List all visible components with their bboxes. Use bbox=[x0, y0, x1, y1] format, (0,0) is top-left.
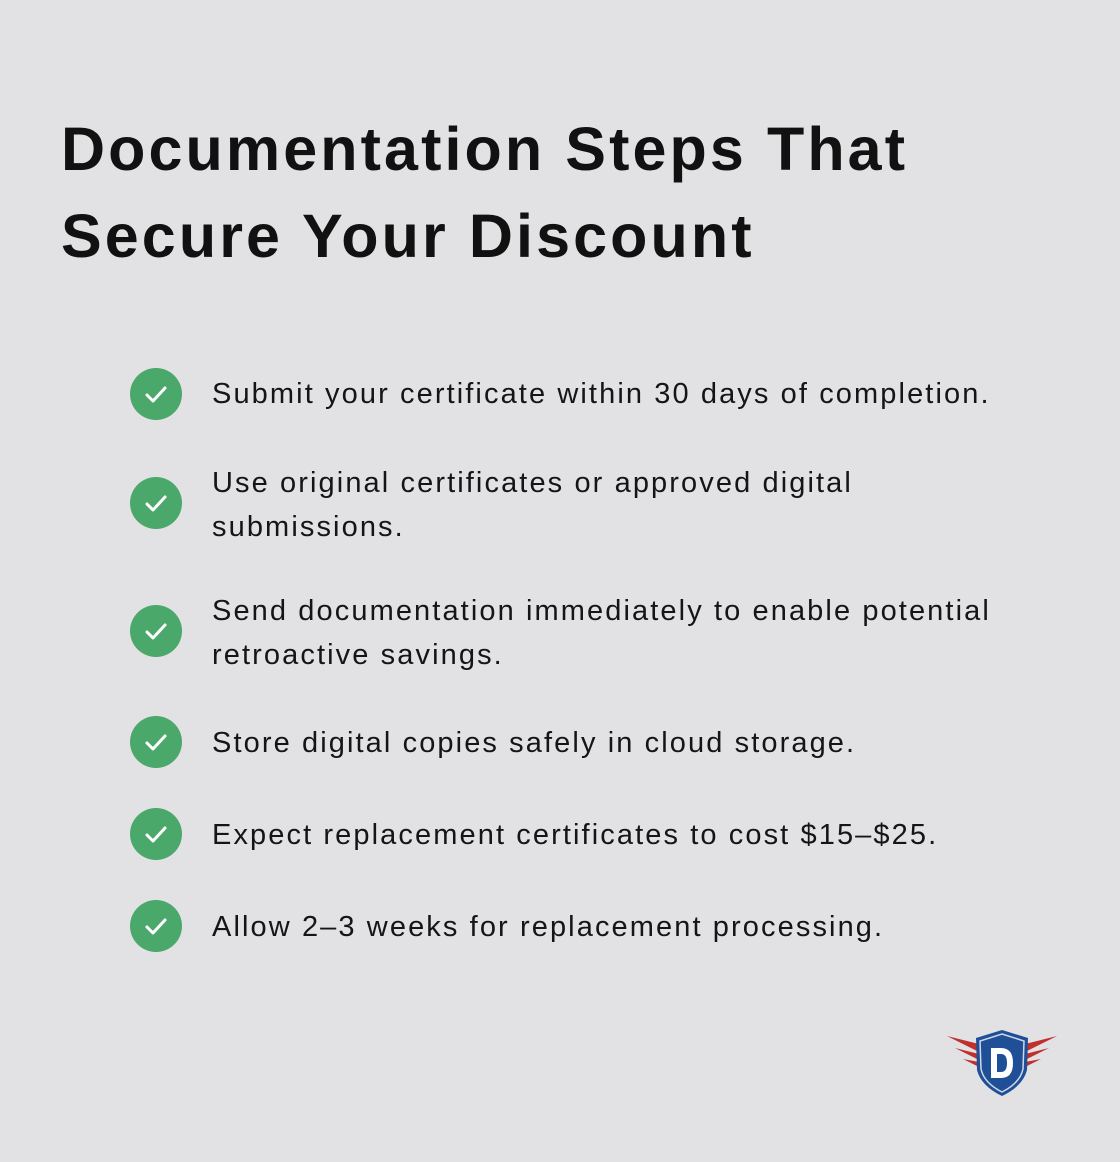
icon: check bbox=[130, 477, 182, 529]
text: Send documentation immediately to enable potential bbox=[212, 595, 991, 627]
text: Submit your certificate within 30 days of completion. bbox=[212, 378, 991, 410]
item 1 bbox=[130, 368, 991, 420]
item 4 bbox=[130, 716, 856, 768]
title: Documentation Steps That bbox=[61, 115, 908, 183]
icon: check bbox=[130, 605, 182, 657]
text: submissions. bbox=[212, 511, 405, 543]
icon: check bbox=[130, 368, 182, 420]
text: Use original certificates or approved digital bbox=[212, 467, 853, 499]
logo bbox=[947, 1030, 1057, 1096]
icon: check bbox=[130, 900, 182, 952]
icon: check bbox=[130, 808, 182, 860]
item 3 bbox=[130, 595, 991, 671]
text: retroactive savings. bbox=[212, 639, 504, 671]
item 6 bbox=[130, 900, 884, 952]
text bbox=[212, 595, 991, 671]
text: Allow 2–3 weeks for replacement processing. bbox=[212, 911, 884, 943]
title bbox=[61, 115, 908, 270]
item 2 bbox=[130, 467, 853, 543]
icon: check bbox=[130, 716, 182, 768]
text bbox=[212, 467, 853, 543]
text: Expect replacement certificates to cost $15–$25. bbox=[212, 819, 938, 851]
item 5 bbox=[130, 808, 938, 860]
title: Secure Your Discount bbox=[61, 202, 755, 270]
text: Store digital copies safely in cloud storage. bbox=[212, 727, 856, 759]
